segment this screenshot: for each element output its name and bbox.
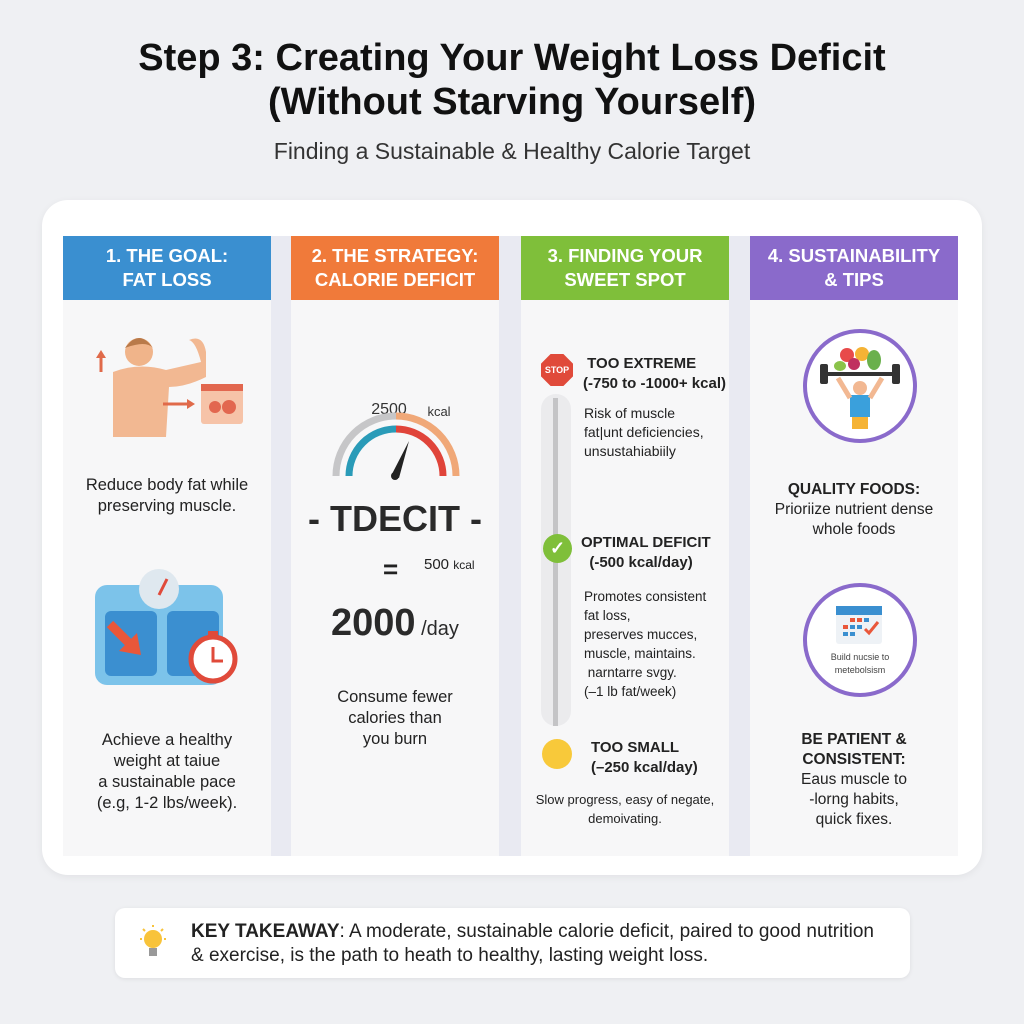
panel: sweet spot: demoivating. bbox=[588, 811, 662, 826]
icon: stop sign: STOP bbox=[545, 365, 569, 375]
callout: key takeaway bbox=[115, 908, 910, 978]
icon: scale with timer bbox=[95, 569, 238, 685]
text: consume fewer bbox=[337, 688, 453, 748]
panel: sweet spot: unsustahiabiily bbox=[584, 443, 676, 459]
header 3: SWEET SPOT bbox=[564, 269, 686, 290]
text: too small: TOO SMALL bbox=[591, 739, 679, 756]
text: be patient: Eaus muscle to bbox=[801, 771, 907, 788]
panel: sweet spot bbox=[521, 236, 729, 856]
header 1: 1. THE GOAL: bbox=[106, 245, 228, 266]
text: quality foods: QUALITY FOODS: bbox=[788, 481, 920, 498]
text: too extreme: TOO EXTREME bbox=[587, 355, 696, 372]
text: consume fewer: calories than bbox=[348, 709, 442, 727]
icon: muscle man bbox=[96, 338, 243, 437]
icon: check: ✓ bbox=[550, 538, 565, 558]
text: too extreme bbox=[583, 355, 726, 392]
gauge: 2500 bbox=[371, 401, 407, 418]
text: optimal: OPTIMAL DEFICIT bbox=[581, 534, 711, 551]
title: Step 3: Creating Your Weight Loss Deficit bbox=[138, 37, 886, 79]
panel: sweet spot: fat loss, bbox=[584, 608, 631, 623]
panel: sweet spot: muscle, maintains. bbox=[584, 646, 696, 661]
header 2 bbox=[291, 236, 499, 300]
text: goal 1 bbox=[86, 476, 248, 515]
text: quality foods bbox=[775, 481, 933, 538]
text: goal 1: Reduce body fat while bbox=[86, 476, 248, 494]
text: too small bbox=[591, 739, 698, 776]
panel: sweet spot: preserves mucces, bbox=[584, 627, 697, 642]
panel: sweet spot: Promotes consistent bbox=[584, 589, 706, 604]
panel: sweet spot: (–1 lb fat/week) bbox=[584, 684, 676, 699]
main card bbox=[42, 200, 982, 875]
text: quality foods: whole foods bbox=[813, 521, 895, 538]
text: TDECIT: - TDECIT - bbox=[308, 498, 482, 539]
text: too small: (–250 kcal/day) bbox=[591, 759, 698, 776]
text: quality foods: Prioriize nutrient dense bbox=[775, 501, 933, 518]
panel: sweet spot: narntarre svgy. bbox=[588, 665, 677, 680]
panel: sweet spot: Risk of muscle bbox=[584, 405, 675, 421]
header 1 bbox=[63, 236, 271, 300]
header 4: 4. SUSTAINABILITY bbox=[768, 245, 940, 266]
header 4 bbox=[750, 236, 958, 300]
header 1: FAT LOSS bbox=[122, 269, 212, 290]
icon: calendar: metebolsism bbox=[835, 665, 885, 675]
text: too extreme: (-750 to -1000+ kcal) bbox=[583, 375, 726, 392]
text: goal 2: weight at taiue bbox=[114, 752, 220, 770]
icon: check bbox=[543, 534, 572, 563]
text: be patient: BE PATIENT & bbox=[801, 731, 907, 748]
text: be patient: -lorng habits, bbox=[809, 791, 899, 808]
text: 2000/day: 2000 /day bbox=[331, 602, 459, 644]
icon: calendar: Build nucsie to bbox=[831, 652, 889, 662]
header 4: & TIPS bbox=[824, 269, 884, 290]
icon: barbell foods bbox=[803, 329, 917, 443]
header 3 bbox=[521, 236, 729, 300]
header 2: 2. THE STRATEGY: bbox=[312, 245, 478, 266]
panel: sweet spot: fat|unt deficiencies, bbox=[584, 424, 704, 440]
text: takeaway: KEY TAKEAWAY: A moderate, sustainable calorie deficit, paired to good nutrition bbox=[191, 921, 874, 942]
title: (Without Starving Yourself) bbox=[268, 81, 756, 123]
panel: the goal bbox=[63, 236, 271, 856]
panel: the strategy: 500 kcal bbox=[424, 556, 475, 573]
text: goal 1: preserving muscle. bbox=[98, 497, 236, 515]
icon: stop sign bbox=[541, 354, 573, 386]
subtitle: Finding a Sustainable & Healthy Calorie Target bbox=[274, 138, 750, 164]
panel: the strategy bbox=[291, 236, 499, 856]
text: goal 2: (e.g, 1-2 lbs/week). bbox=[97, 794, 237, 812]
text: minus 500: = bbox=[383, 554, 398, 584]
text: goal 2: a sustainable pace bbox=[98, 773, 236, 791]
text: goal 2: Achieve a healthy bbox=[102, 731, 232, 749]
text: takeaway bbox=[191, 921, 874, 966]
text: optimal bbox=[581, 534, 711, 571]
panel: sweet spot: Slow progress, easy of negate, bbox=[536, 792, 714, 807]
text: consume fewer: you burn bbox=[363, 730, 427, 748]
icon: bulb bbox=[140, 925, 166, 956]
panel: sustainability bbox=[750, 236, 958, 856]
header 2: CALORIE DEFICIT bbox=[315, 269, 475, 290]
text: optimal: (-500 kcal/day) bbox=[589, 554, 693, 571]
column gaps bbox=[271, 236, 291, 856]
gauge bbox=[332, 401, 460, 480]
text: be patient bbox=[801, 731, 907, 828]
track bbox=[541, 394, 571, 726]
icon: calendar bbox=[803, 583, 917, 697]
text: consume fewer: Consume fewer bbox=[337, 688, 453, 706]
text: be patient: quick fixes. bbox=[816, 811, 892, 828]
text: be patient: CONSISTENT: bbox=[802, 751, 906, 768]
title bbox=[138, 37, 886, 123]
gauge: kcal bbox=[427, 404, 451, 419]
header 3: 3. FINDING YOUR bbox=[548, 245, 702, 266]
text: takeaway: & exercise, is the path to heath to healthy, lasting weight loss. bbox=[191, 945, 708, 966]
text: goal 2 bbox=[97, 731, 237, 812]
icon: yellow dot bbox=[542, 739, 572, 769]
